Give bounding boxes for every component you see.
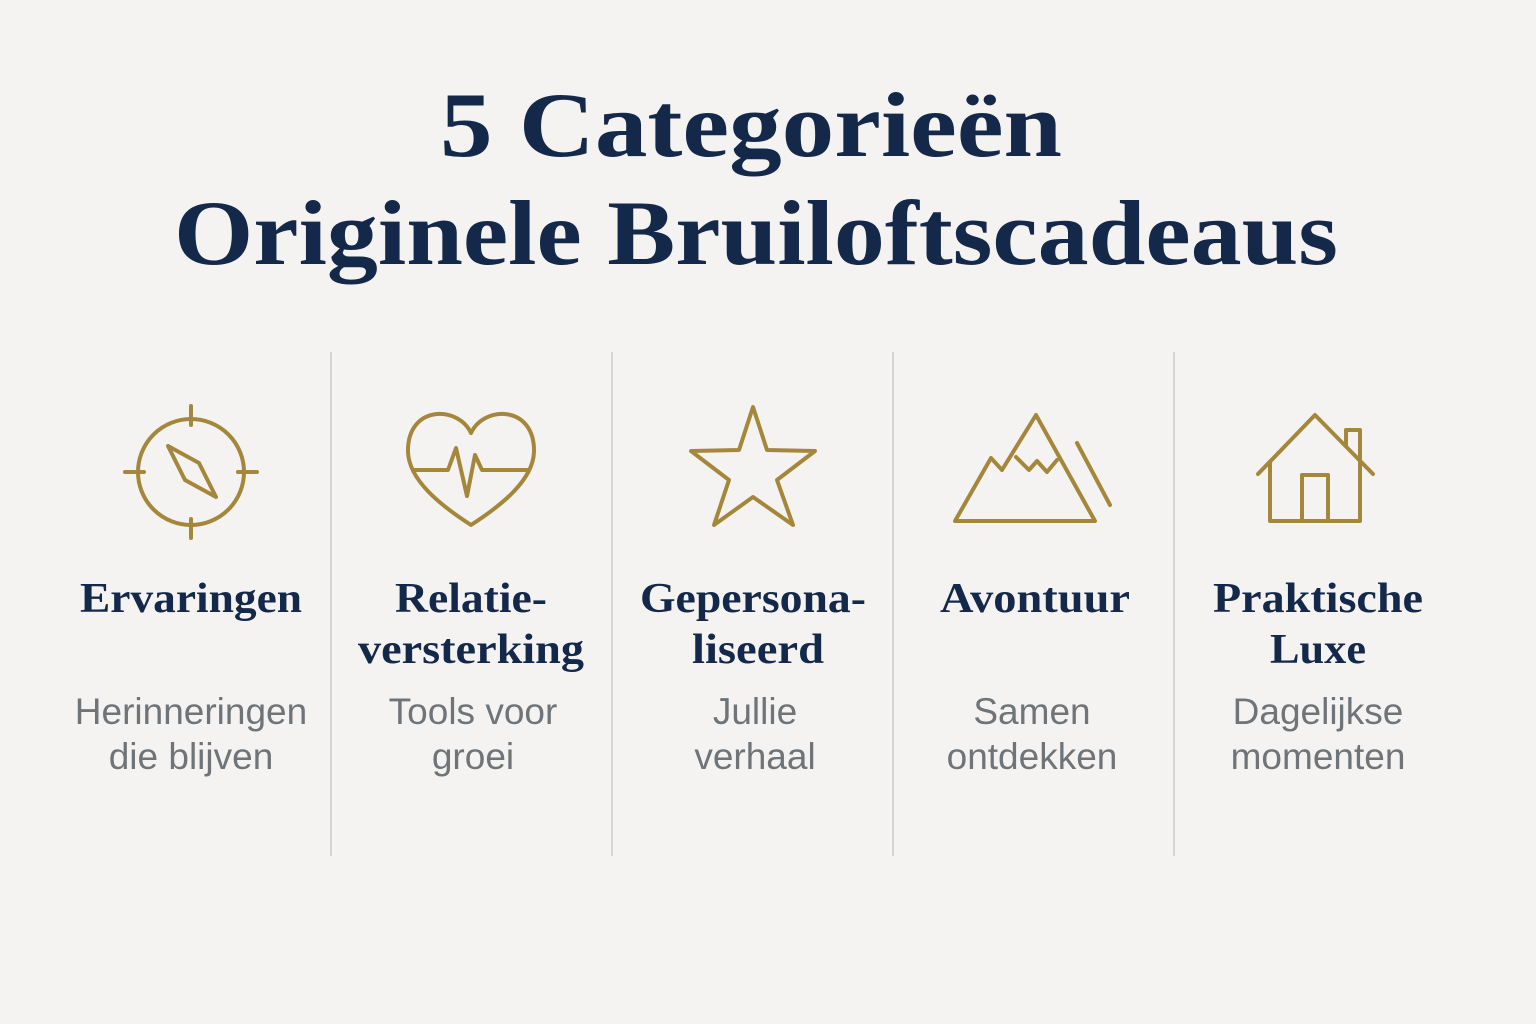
descriptions: Tools voor [389, 691, 557, 732]
descriptions: Samen [973, 691, 1091, 732]
descriptions: verhaal [694, 736, 816, 777]
icon: heart pulse [408, 414, 534, 525]
headings: Luxe [1270, 627, 1366, 673]
headings: Ervaringen [80, 576, 302, 622]
headings: Avontuur [940, 576, 1130, 622]
descriptions: Herinneringen [75, 691, 307, 732]
headings: Relatie- [395, 576, 547, 622]
descriptions: Dagelijkse [1233, 691, 1403, 732]
descriptions [75, 691, 1405, 777]
title: 5 Categorieën [440, 74, 1062, 176]
icon: compass [125, 406, 257, 538]
descriptions: momenten [1231, 736, 1405, 777]
descriptions: groei [432, 736, 514, 777]
icon: mountain [955, 415, 1110, 521]
headings [80, 576, 1423, 673]
descriptions: ontdekken [947, 736, 1117, 777]
title [174, 74, 1338, 284]
descriptions: Jullie [713, 691, 797, 732]
icon: star [691, 407, 815, 525]
headings: Gepersona- [640, 576, 866, 622]
icon: house [1258, 415, 1373, 521]
headings: Praktische [1213, 576, 1423, 622]
title: Originele Bruiloftscadeaus [174, 182, 1338, 284]
descriptions: die blijven [109, 736, 273, 777]
headings: liseerd [692, 627, 824, 673]
headings: versterking [358, 627, 584, 673]
